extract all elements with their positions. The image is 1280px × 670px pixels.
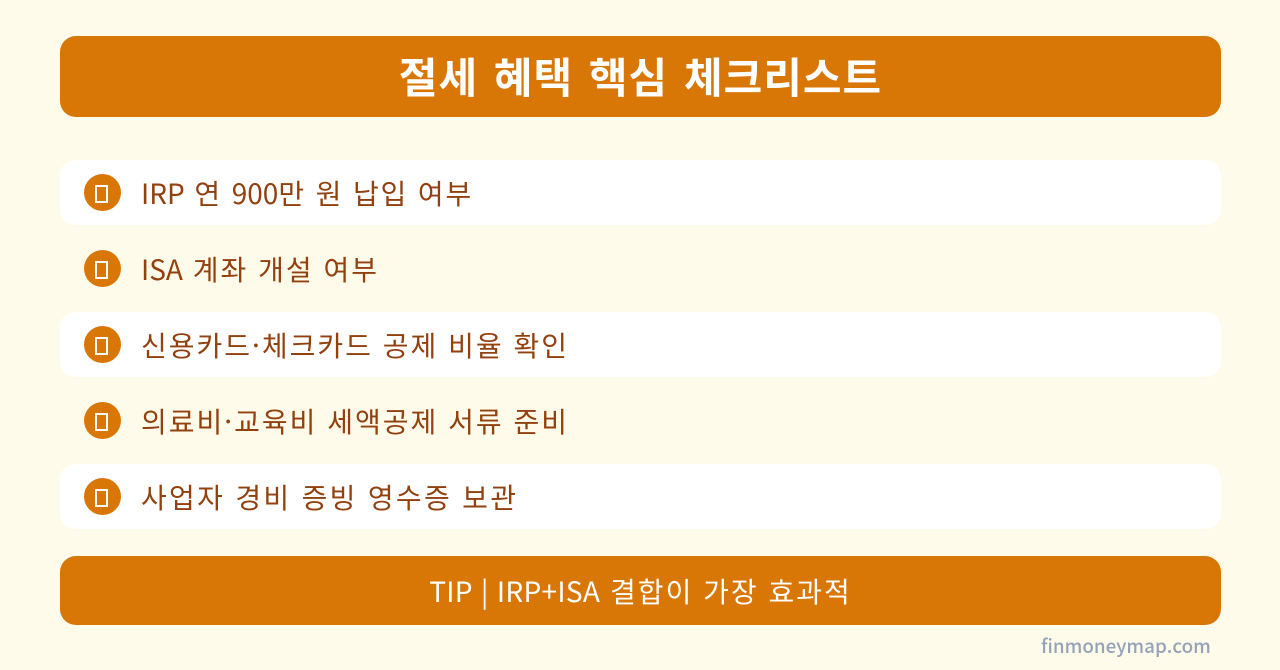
icon: check badge — [84, 250, 121, 287]
item text: 의료비·교육비 세액공제 서류 준비 — [141, 401, 569, 441]
icon: check badge — [84, 174, 121, 211]
title banner — [60, 36, 1221, 117]
checklist item: medical and education — [84, 401, 569, 441]
checklist item: ISA — [84, 249, 379, 289]
checklist item: IRP — [60, 160, 1221, 225]
icon: check badge — [84, 478, 121, 515]
tip banner: TIP | IRP+ISA 결합이 가장 효과적 — [429, 571, 852, 611]
footer source: finmoneymap.com — [1041, 632, 1211, 659]
item text: ISA 계좌 개설 여부 — [141, 249, 379, 289]
item text: 사업자 경비 증빙 영수증 보관 — [141, 477, 518, 517]
checklist item: card deduction — [60, 312, 1221, 377]
tip banner — [60, 556, 1221, 625]
item text: 신용카드·체크카드 공제 비율 확인 — [141, 325, 569, 365]
icon: check badge — [84, 402, 121, 439]
icon: check badge — [84, 326, 121, 363]
title banner: 절세 혜택 핵심 체크리스트 — [399, 45, 882, 106]
checklist item: business receipts — [60, 464, 1221, 529]
item text: IRP 연 900만 원 납입 여부 — [141, 173, 473, 213]
